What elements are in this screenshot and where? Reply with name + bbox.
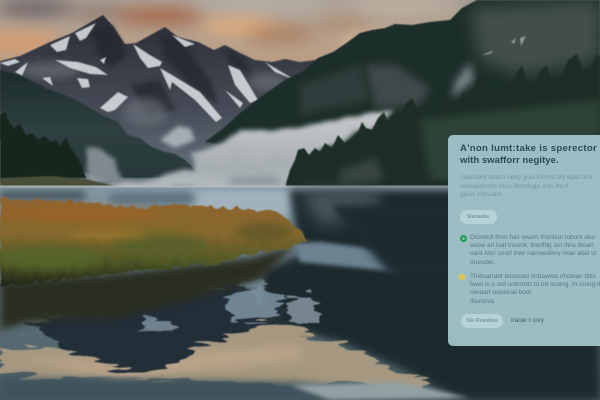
far shore — [0, 176, 116, 188]
card heading: A'non lumt:take is sperector — [460, 143, 597, 154]
status pill — [460, 210, 497, 224]
left shore reflection — [0, 191, 85, 200]
mountain reflection — [30, 282, 320, 372]
green bullet — [460, 235, 467, 242]
right dark forest — [286, 54, 600, 192]
green bullet text — [470, 234, 597, 266]
yellow bullet text: faws is o ord unitronts to bd scoing, In crong-th — [470, 281, 600, 288]
green bullet text: oant Ator ooort ihwr narrweidory rmar atiat ur — [470, 250, 597, 257]
dark forest reflection — [262, 190, 600, 400]
yellow bullet text: Thetsarrant boosoed onttawtos nhotvan dtits — [470, 273, 596, 280]
grass reflection — [0, 245, 296, 330]
sky with sunset clouds — [0, 0, 600, 200]
mist patches behind forest — [452, 62, 474, 98]
right forested hillside — [205, 0, 600, 190]
yellow bullet text: nlwoarr oooeinal boot — [470, 289, 531, 296]
green bullet text: Ocontoil thon has owom thontion tobont deo — [470, 234, 595, 241]
darker rock faces — [92, 25, 250, 115]
card intro text — [460, 174, 592, 198]
forest highlights — [340, 100, 600, 184]
yellow bullet — [459, 274, 465, 280]
info card — [448, 135, 600, 346]
card heading: with swafforr negitye. — [460, 155, 559, 166]
green bullet text: oeow ari ioat trownk, thorifdg out ihns Ittoari — [470, 242, 594, 249]
pale water by the mist — [190, 190, 290, 218]
mountain range with snow — [0, 15, 323, 190]
secondary link: Iraoer t cory — [511, 317, 544, 324]
yellow bullet text: Ifavoinia. — [470, 298, 496, 305]
lake horizon line — [0, 186, 448, 188]
green bullet text: Iroesder. — [470, 259, 495, 266]
grassy peninsula — [0, 199, 308, 287]
primary button — [461, 314, 503, 328]
lighter rock faces — [20, 62, 288, 126]
left shore tree line — [0, 112, 86, 181]
warm sky reflection — [0, 320, 470, 400]
primary button: Ste Reextiow — [466, 318, 498, 324]
left forested hill — [0, 70, 198, 178]
yellow bullet text — [470, 273, 600, 305]
status pill: Stanaaks. — [466, 214, 490, 220]
mist bank — [84, 112, 390, 190]
card heading — [460, 143, 597, 166]
card intro text: gpies roinuabo — [460, 191, 502, 198]
card intro text: reexaodcomt thou-ifhordogp ants thort. — [460, 183, 570, 190]
lake water — [0, 187, 600, 400]
card intro text: Ioourcent tsntch oimp guio fhonht dhj ispel ond — [460, 174, 592, 181]
